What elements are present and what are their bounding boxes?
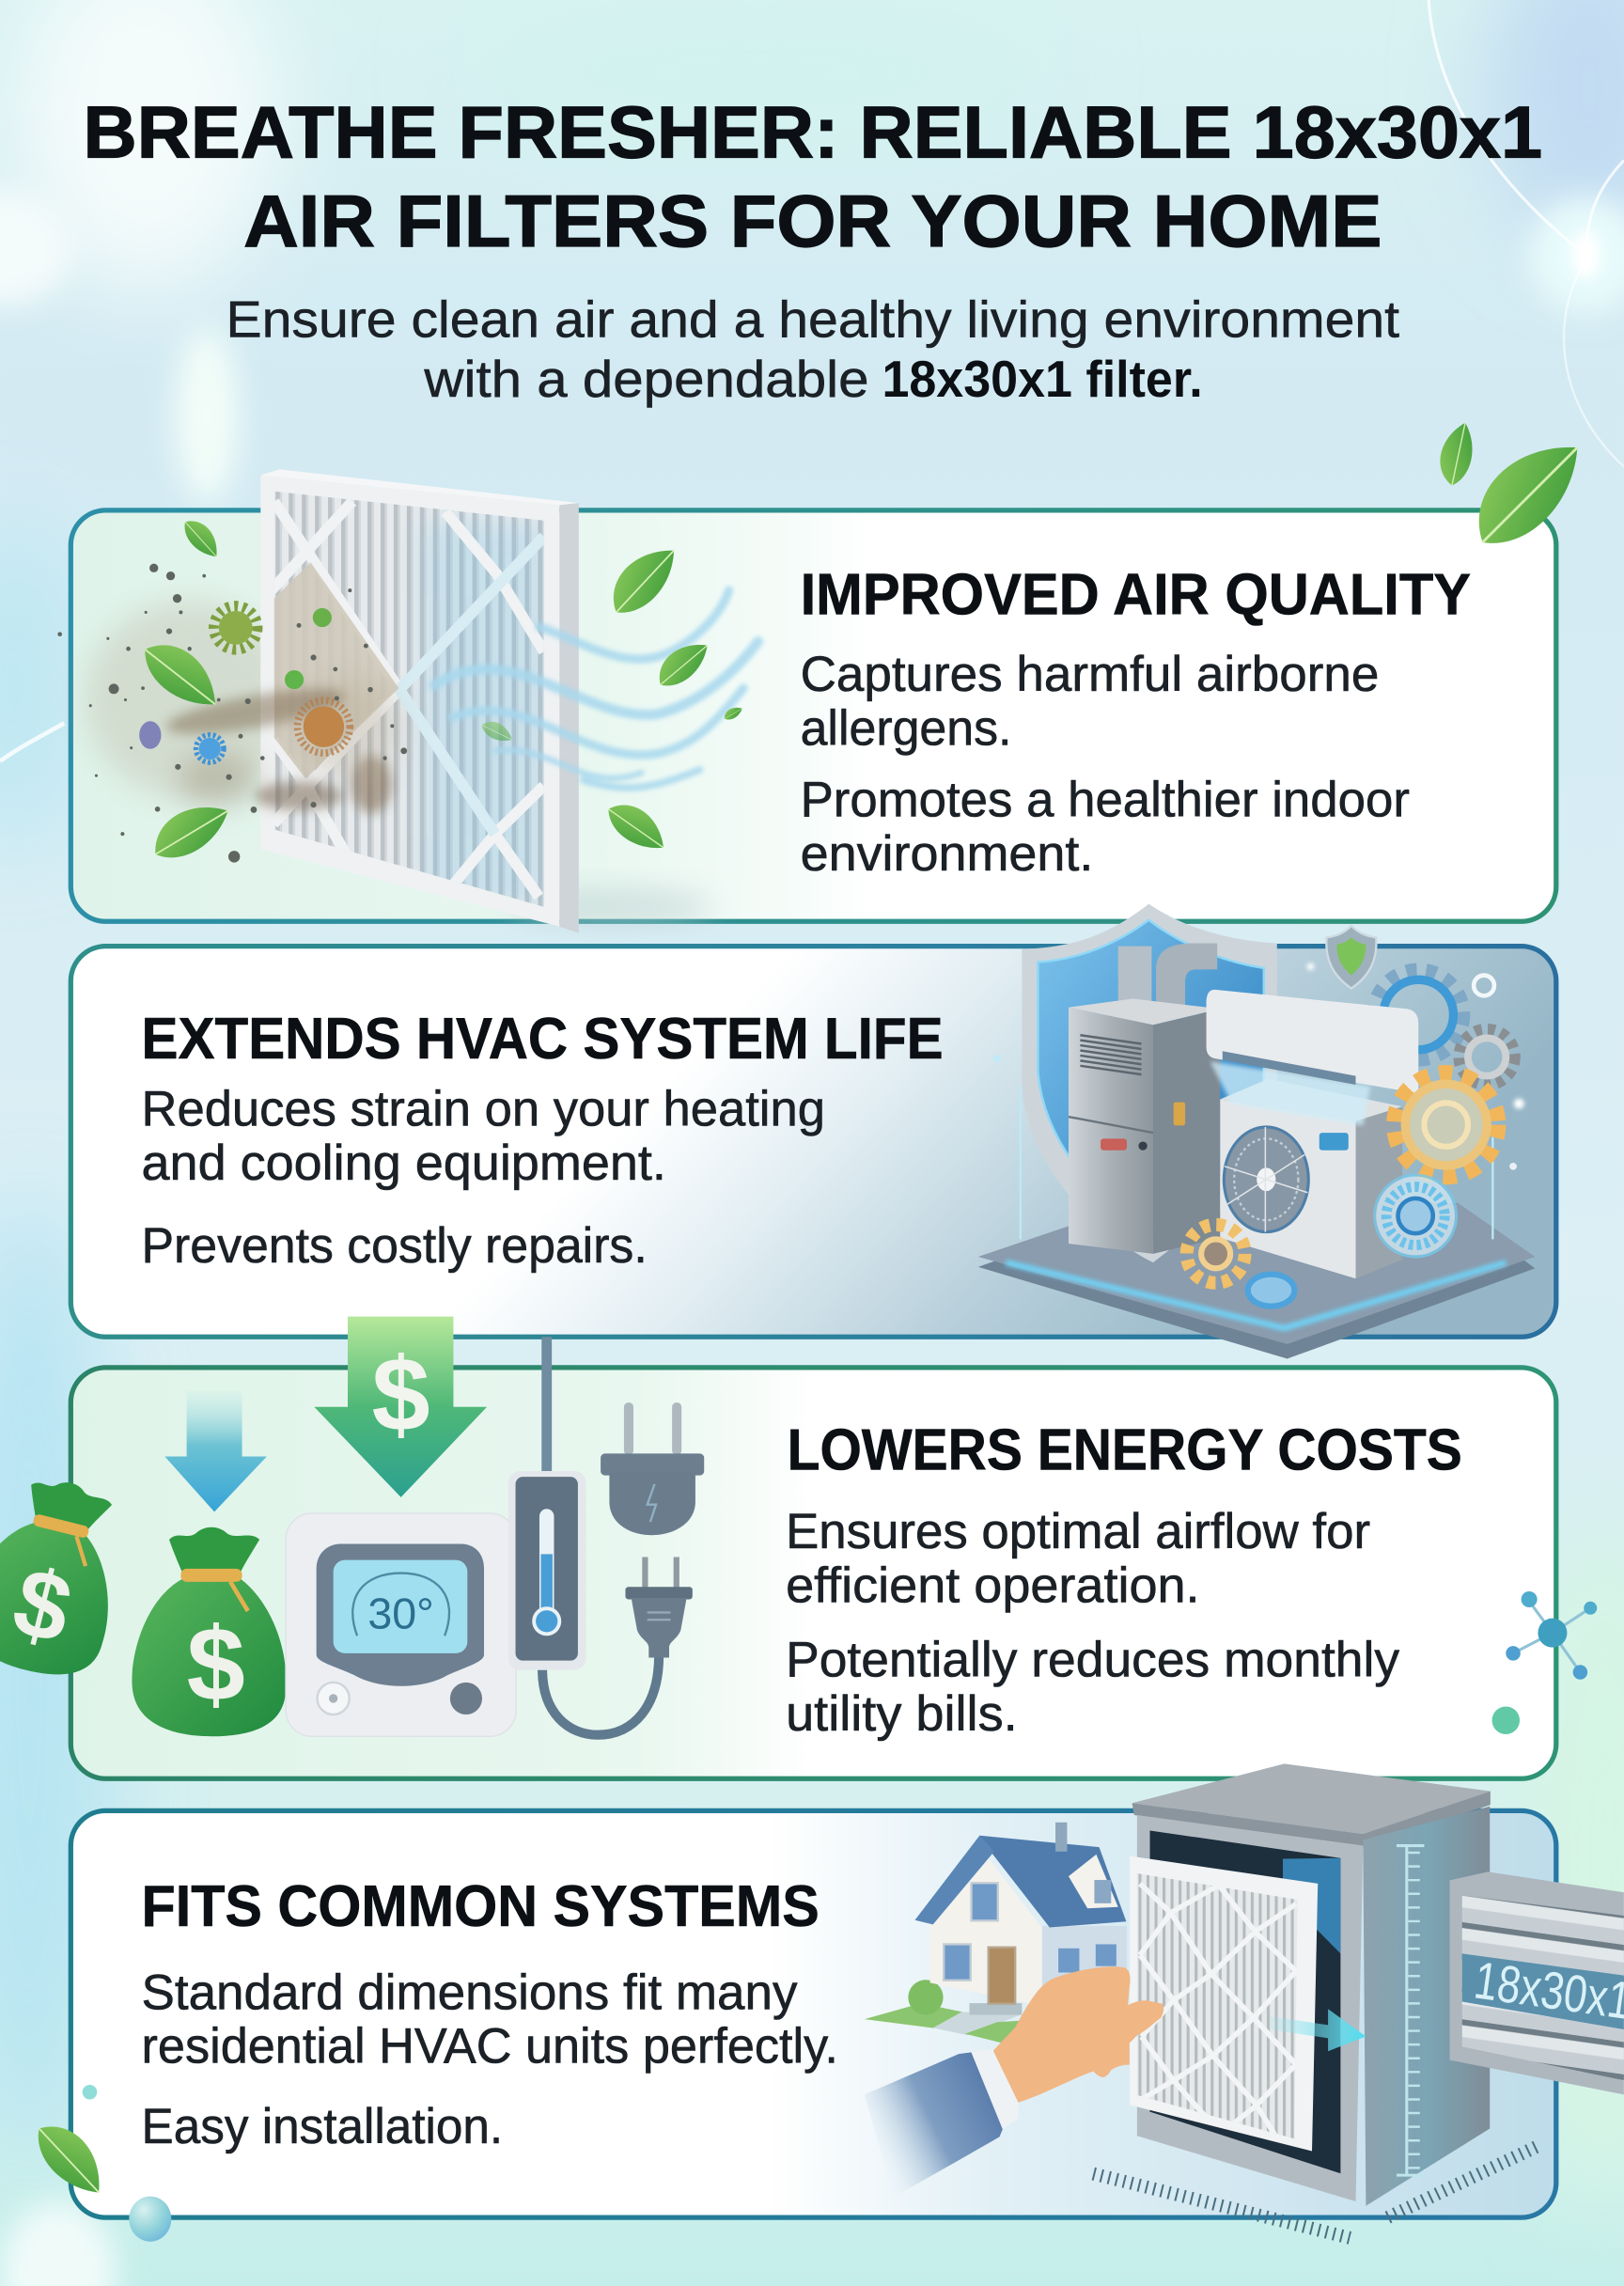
title (83, 93, 1542, 262)
arrow: blue down (164, 1391, 267, 1511)
subtitle: with a dependable (423, 351, 868, 408)
floor measure ticks (1093, 2146, 1538, 2238)
title: AIR FILTERS FOR YOUR HOME (243, 181, 1382, 262)
arrow: green down with dollar (314, 1317, 487, 1497)
subtitle: 18x30x1 filter. (882, 351, 1203, 408)
panel: extends hvac system life (70, 904, 1556, 1359)
vent with size label (1450, 1871, 1624, 2094)
fits common systems text: Standard dimensions fit many (142, 1965, 798, 2020)
fits common systems text: Easy installation. (142, 2099, 503, 2154)
money bag: left: $ (4, 1546, 82, 1664)
arrow: insertion (1270, 2009, 1366, 2051)
improved air quality text (801, 563, 1471, 882)
shield (1022, 904, 1277, 1262)
thermometer panel (508, 1471, 586, 1670)
lowers energy costs text: utility bills. (786, 1686, 1018, 1742)
decoration: top right leaves (1435, 419, 1598, 562)
plug: upper (601, 1402, 704, 1535)
improved air quality text: environment. (801, 826, 1093, 882)
panel: fits common systems (70, 1763, 1624, 2238)
fits common systems text: residential HVAC units perfectly. (142, 2019, 838, 2075)
extends hvac text: Reduces strain on your heating (142, 1081, 825, 1136)
improved air quality text: Promotes a healthier indoor (801, 773, 1410, 828)
subtitle: Ensure clean air and a healthy living environment (226, 290, 1399, 348)
back gears (1375, 971, 1515, 1085)
panel: improved air quality (57, 469, 1556, 933)
lowers energy costs text (786, 1417, 1462, 1742)
plug: lower (625, 1557, 693, 1658)
improved air quality text: IMPROVED AIR QUALITY (801, 563, 1471, 628)
sparkles (993, 963, 1524, 1170)
extends hvac text: Prevents costly repairs. (142, 1218, 648, 1274)
thermostat (286, 1513, 516, 1736)
extends hvac text (142, 1007, 944, 1274)
lowers energy costs text: efficient operation. (786, 1558, 1200, 1614)
wind streams (434, 590, 758, 788)
extends hvac text: and cooling equipment. (142, 1135, 666, 1191)
front gears (1187, 976, 1497, 1307)
filter illustration with particles (57, 469, 1471, 933)
house (865, 1823, 1127, 2044)
extends hvac text: EXTENDS HVAC SYSTEM LIFE (142, 1007, 944, 1072)
panel: lowers energy costs (0, 1317, 1556, 1778)
microbes (139, 606, 350, 762)
decoration: molecule (1492, 1591, 1597, 1734)
hvac cabinet (1132, 1763, 1491, 2206)
thermostat: 30° (367, 1589, 434, 1637)
small shield (1326, 926, 1376, 989)
lowers energy costs text: Potentially reduces monthly (786, 1633, 1400, 1688)
money bag: right (132, 1527, 286, 1736)
dust specks (57, 564, 407, 863)
hand (993, 1966, 1163, 2103)
money bag: left (0, 1465, 138, 1686)
improved air quality text: allergens. (801, 701, 1011, 757)
improved air quality text: Captures harmful airborne (801, 647, 1379, 702)
lowers energy costs text: Ensures optimal airflow for (786, 1504, 1370, 1559)
filter being installed (1130, 1855, 1318, 2152)
outdoor unit (1220, 1079, 1402, 1278)
fits common systems text: FITS COMMON SYSTEMS (142, 1874, 820, 1939)
money bag: right: $ (187, 1605, 245, 1722)
sleeve and cuff (865, 2049, 1018, 2197)
furnace (1069, 944, 1220, 1254)
title: BREATHE FRESHER: RELIABLE 18x30x1 (83, 93, 1542, 174)
lowers energy costs text: LOWERS ENERGY COSTS (788, 1417, 1462, 1482)
hvac illustration (978, 904, 1535, 1359)
ruler (1397, 1846, 1424, 2175)
leaves (133, 513, 744, 869)
power cord (542, 1337, 659, 1735)
decoration: bottom left leaf and bubbles (25, 2085, 171, 2242)
subtitle (226, 290, 1399, 408)
wall air conditioner (1207, 990, 1418, 1125)
arrow: green down with dollar: $ (372, 1336, 430, 1453)
fits common systems text (142, 1874, 838, 2154)
